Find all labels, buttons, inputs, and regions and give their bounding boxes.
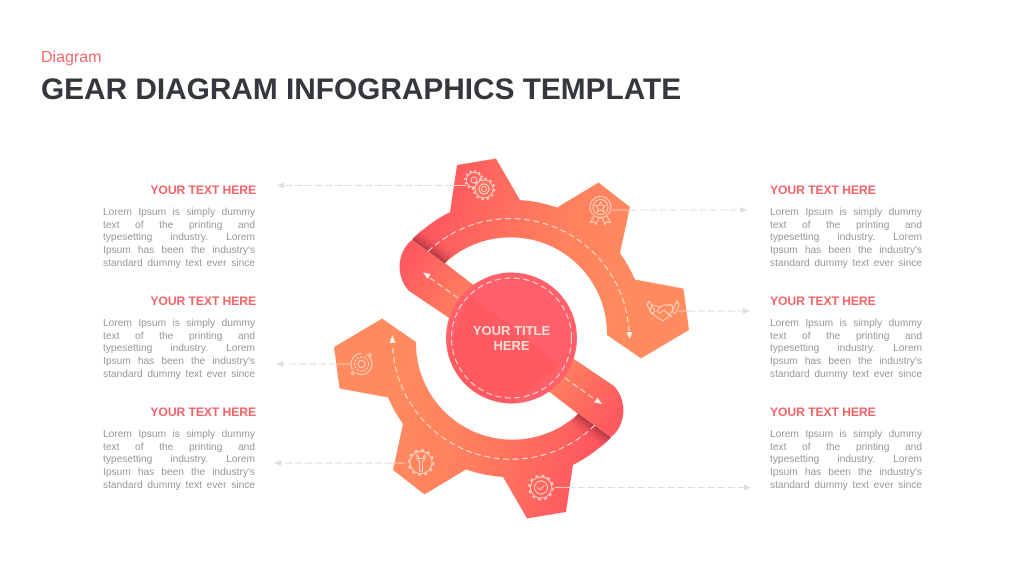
left text block 2: text of the printing and bbox=[103, 331, 255, 342]
right text block 1: typesetting industry. Lorem bbox=[770, 232, 922, 243]
left text block 1: text of the printing and bbox=[103, 220, 255, 231]
left text block 2: typesetting industry. Lorem bbox=[103, 343, 255, 354]
right text block 1: standard dummy text ever since bbox=[770, 258, 922, 269]
centre circle: HERE bbox=[493, 338, 530, 353]
left text block 1: standard dummy text ever since bbox=[103, 258, 255, 269]
right text block 2: YOUR TEXT HERE bbox=[770, 294, 876, 308]
right text block 3: typesetting industry. Lorem bbox=[770, 454, 922, 465]
left text block 2: YOUR TEXT HERE bbox=[150, 294, 256, 308]
right text block 3: standard dummy text ever since bbox=[770, 480, 922, 491]
left text block 2: standard dummy text ever since bbox=[103, 369, 255, 380]
icon: target orbit bbox=[351, 354, 372, 374]
left text block 1: Ipsum has been the industry's bbox=[103, 245, 255, 256]
icon: check gear bbox=[529, 476, 553, 500]
right text block 1 bbox=[770, 183, 922, 269]
upper gear half bbox=[400, 158, 689, 358]
icon: gears bbox=[465, 171, 494, 200]
right text block 3 bbox=[770, 405, 922, 491]
subtitle: Diagram bbox=[41, 49, 101, 66]
right text block 3: YOUR TEXT HERE bbox=[770, 405, 876, 419]
leader arrowheads bbox=[274, 182, 751, 490]
icon: handshake bbox=[647, 301, 679, 321]
left text block 2: Ipsum has been the industry's bbox=[103, 356, 255, 367]
left text block 3: Lorem Ipsum is simply dummy bbox=[103, 429, 255, 440]
right text block 2 bbox=[770, 294, 922, 380]
right text block 2: text of the printing and bbox=[770, 331, 922, 342]
right text block 2: typesetting industry. Lorem bbox=[770, 343, 922, 354]
right text block 1: Ipsum has been the industry's bbox=[770, 245, 922, 256]
leader lines bbox=[279, 186, 746, 488]
centre label: YOUR TITLE bbox=[473, 323, 550, 338]
left text block 1: YOUR TEXT HERE bbox=[150, 183, 256, 197]
left text block 3: typesetting industry. Lorem bbox=[103, 454, 255, 465]
lower gear half bbox=[334, 318, 623, 518]
left text block 3: text of the printing and bbox=[103, 442, 255, 453]
right text block 2: Ipsum has been the industry's bbox=[770, 356, 922, 367]
left text block 3: YOUR TEXT HERE bbox=[150, 405, 256, 419]
left text block 1: typesetting industry. Lorem bbox=[103, 232, 255, 243]
right text block 1: Lorem Ipsum is simply dummy bbox=[770, 207, 922, 218]
right text block 3: text of the printing and bbox=[770, 442, 922, 453]
icon: award rosette bbox=[590, 196, 611, 224]
right text block 3: Lorem Ipsum is simply dummy bbox=[770, 429, 922, 440]
centre circle bbox=[446, 272, 577, 404]
right text block 2: Lorem Ipsum is simply dummy bbox=[770, 318, 922, 329]
dashed arrows on gear bbox=[392, 219, 629, 459]
icon: wrench gear bbox=[408, 450, 434, 475]
arrowheads on gear bbox=[390, 272, 632, 404]
right text block 2: standard dummy text ever since bbox=[770, 369, 922, 380]
right text block 1: YOUR TEXT HERE bbox=[770, 183, 876, 197]
leader stubs over gear bbox=[336, 186, 688, 488]
right text block 1: text of the printing and bbox=[770, 220, 922, 231]
left text block 3: Ipsum has been the industry's bbox=[103, 467, 255, 478]
left text block 3: standard dummy text ever since bbox=[103, 480, 255, 491]
right text block 3: Ipsum has been the industry's bbox=[770, 467, 922, 478]
dashed ring bbox=[452, 278, 572, 398]
gear diagram bbox=[274, 158, 750, 518]
left text block 3 bbox=[103, 405, 256, 491]
left text block 1: Lorem Ipsum is simply dummy bbox=[103, 207, 255, 218]
left text block 2: Lorem Ipsum is simply dummy bbox=[103, 318, 255, 329]
title: GEAR DIAGRAM INFOGRAPHICS TEMPLATE bbox=[41, 73, 681, 106]
left text block 2 bbox=[103, 294, 256, 380]
left text block 1 bbox=[103, 183, 256, 269]
